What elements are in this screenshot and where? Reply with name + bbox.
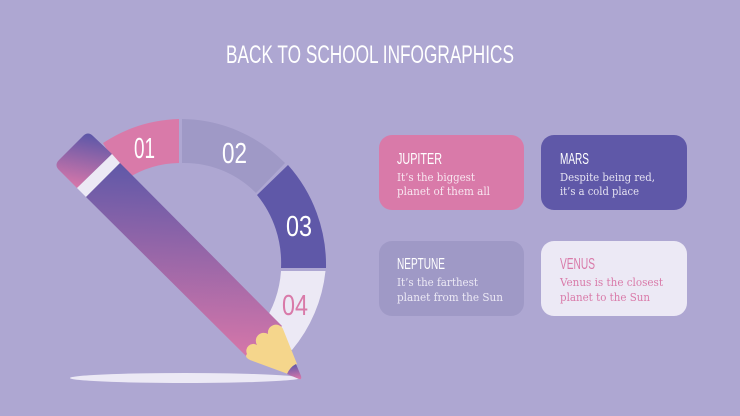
card: Jupiter (379, 135, 524, 210)
card: Venus: VENUS (560, 256, 595, 273)
segment 01: 01 (134, 133, 155, 165)
pencil eraser (56, 134, 112, 188)
pencil wood tip (246, 325, 297, 374)
segment 04 (262, 271, 326, 350)
segment 03: 03 (286, 211, 312, 243)
card: Mars: MARS (560, 151, 589, 168)
segment 03 (257, 165, 326, 268)
title: BACK TO SCHOOL INFOGRAPHICS (226, 41, 514, 69)
card: Venus (541, 241, 687, 316)
segment 02 (182, 119, 285, 193)
card: Neptune: planet from the Sun (397, 291, 503, 304)
card: Jupiter: JUPITER (397, 151, 442, 168)
shadow ellipse (70, 373, 300, 383)
card: Venus: planet to the Sun (560, 291, 650, 304)
segment 01 (103, 119, 179, 180)
pencil body (86, 163, 282, 360)
card: Mars: it’s a cold place (560, 185, 639, 198)
card: Mars (541, 135, 687, 210)
pencil band (77, 154, 120, 197)
segment 02: 02 (222, 138, 247, 170)
card: Neptune: It’s the farthest (397, 276, 478, 289)
card: Jupiter: planet of them all (397, 185, 490, 198)
ring chart (103, 119, 326, 350)
segment 04: 04 (282, 290, 308, 322)
card: Venus: Venus is the closest (559, 276, 663, 289)
pencil (56, 134, 301, 379)
card: Neptune (379, 241, 524, 316)
card: Neptune: NEPTUNE (397, 256, 445, 273)
pencil lead (287, 364, 301, 379)
card: Mars: Despite being red, (560, 171, 655, 184)
card: Jupiter: It’s the biggest (397, 171, 475, 184)
